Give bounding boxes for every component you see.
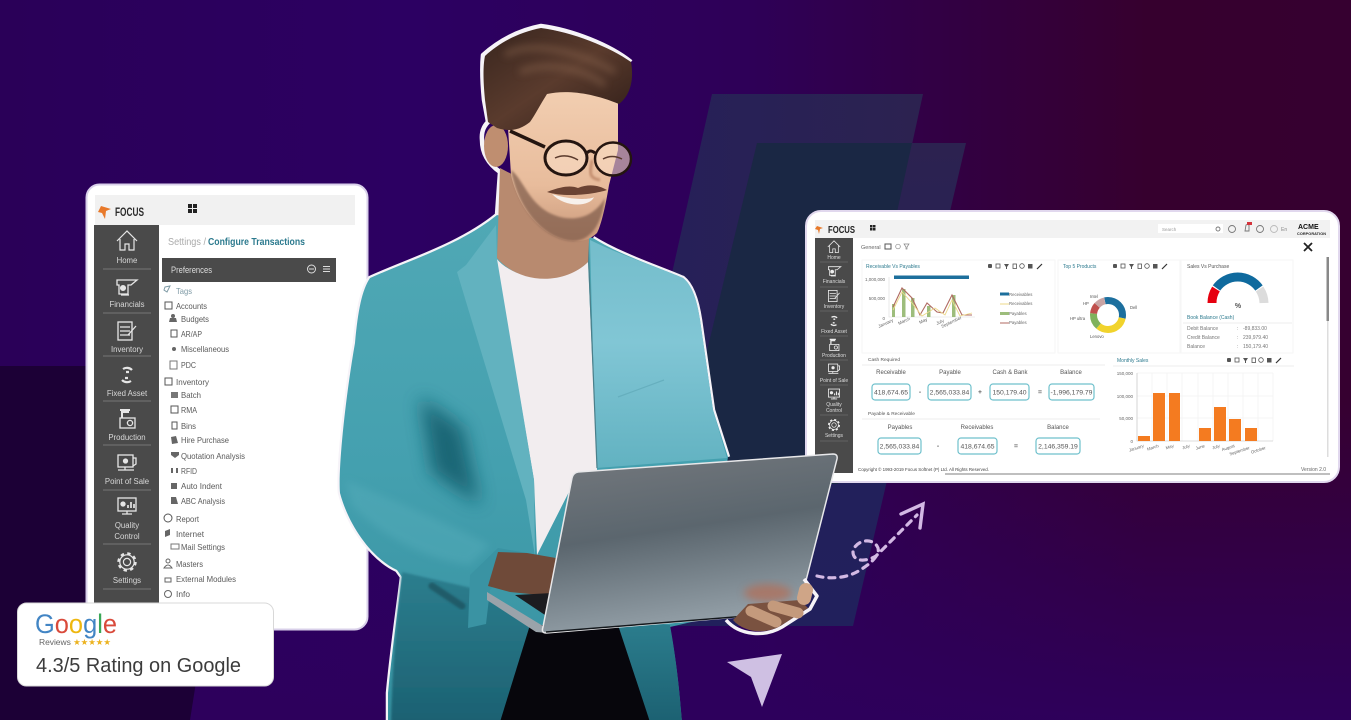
navigation sidebar: Control	[114, 532, 140, 541]
block: payable and receivable: Payable & Receivable	[868, 411, 915, 417]
dashboard sidebar: Point of Sale	[820, 378, 848, 384]
preferences menu tree: Miscellaneous	[181, 344, 229, 354]
block: cash required: Receivable	[876, 370, 907, 376]
chart: receivable vs payables: July	[935, 318, 945, 326]
preferences menu tree: Masters	[176, 559, 203, 569]
chart: top 5 products donut: Top 5 Products	[1063, 264, 1097, 270]
chart: receivable vs payables: 500,000	[869, 296, 885, 301]
dashboard sidebar: Production	[822, 353, 846, 359]
chart: monthly sales: 100,000	[1117, 394, 1133, 399]
nose shadow	[590, 160, 600, 180]
left lapel	[457, 225, 535, 556]
cursor arrow	[727, 654, 782, 707]
dashboard sidebar: Home	[827, 255, 841, 261]
chart: receivable vs payables: Receivables	[1009, 292, 1032, 297]
chart: receivable vs payables: May	[918, 316, 929, 325]
hair highlights	[505, 48, 615, 85]
torso shadow	[420, 397, 480, 505]
jacket base	[340, 215, 728, 720]
dashboard sidebar: Inventory	[824, 304, 845, 310]
dashboard top bar: Search	[1162, 227, 1177, 232]
chart: top 5 products donut: Intel	[1090, 294, 1098, 299]
preferences menu tree: Inventory	[176, 377, 210, 387]
dark background block, lower left	[0, 366, 246, 720]
preferences menu tree: Accounts	[176, 301, 207, 311]
navigation sidebar: Financials	[109, 300, 145, 309]
chart: top 5 products donut: Dell	[1130, 305, 1137, 310]
block: cash required: Payable	[939, 370, 962, 376]
parallelogram overlap	[675, 143, 912, 484]
settings header bar	[95, 195, 355, 225]
chart: receivable vs payables: March	[897, 316, 911, 326]
chart: monthly sales: 50,000	[1119, 416, 1133, 421]
background parallelogram, rear	[625, 94, 923, 484]
block: cash required: Cash & Bank	[992, 370, 1029, 376]
dashboard top bar: ACME	[1298, 224, 1319, 231]
preferences menu tree: AR/AP	[181, 329, 202, 339]
right hand shadow	[733, 600, 808, 631]
dashed arrow	[817, 504, 923, 578]
block: payable and receivable: 2,565,033.84	[880, 444, 920, 450]
block: payable and receivable: 418,674.65	[960, 444, 995, 450]
smile	[552, 194, 594, 205]
t-shirt	[496, 258, 597, 555]
dashboard sidebar: Financials	[823, 279, 846, 285]
navigation sidebar: Inventory	[111, 345, 143, 354]
dashboard footer	[858, 466, 1330, 474]
navigation sidebar: Production	[108, 433, 146, 442]
block: payable and receivable: Receivables	[961, 425, 993, 431]
dashboard sidebar: Fixed Asset	[821, 329, 848, 335]
chart: receivable vs payables: Receivables	[1009, 301, 1032, 306]
preferences menu tree: Tags	[176, 286, 192, 296]
preferences menu tree: Hire Purchase	[181, 435, 229, 445]
block: cash required: 418,674.65	[874, 390, 908, 396]
right thumb	[804, 590, 806, 598]
preferences menu tree: PDC	[181, 360, 196, 370]
sleeve fold highlight	[345, 480, 490, 565]
navigation sidebar: Fixed Asset	[107, 389, 148, 398]
preferences menu tree: External Modules	[176, 574, 236, 584]
jacket lower body	[391, 572, 535, 720]
breadcrumb heading	[168, 236, 305, 248]
laptop base	[487, 592, 547, 633]
chart: sales vs purchase gauge: Debit Balance	[1187, 326, 1218, 332]
right fingers	[751, 606, 798, 622]
dashboard sidebar: Quality	[826, 402, 842, 408]
block: payable and receivable: 2,146,359.19	[1038, 444, 1078, 450]
preferences menu tree: Info	[176, 589, 190, 599]
chart: top 5 products donut: Lenovo	[1090, 334, 1104, 339]
preferences bar	[162, 258, 336, 282]
chart: top 5 products donut	[1058, 260, 1180, 353]
navigation sidebar: Quality	[115, 521, 139, 530]
chart: receivable vs payables: Payables	[1009, 320, 1027, 325]
chart: sales vs purchase gauge: 150,179.40	[1243, 344, 1268, 350]
chart: monthly sales: May	[1165, 443, 1175, 450]
chart: monthly sales: January	[1128, 443, 1145, 453]
block: cash required: 2,565,033.84	[930, 390, 970, 396]
chart: receivable vs payables: January	[877, 317, 895, 329]
chart: receivable vs payables: Receivable Vs Payables	[866, 264, 920, 270]
hair	[484, 28, 632, 130]
trousers	[500, 625, 650, 720]
dashboard sidebar	[815, 238, 853, 473]
chart: monthly sales: June	[1195, 443, 1206, 451]
chart: sales vs purchase gauge: :	[1237, 344, 1238, 350]
preferences menu tree: RFID	[181, 466, 197, 476]
google wordmark: Google	[35, 609, 117, 639]
preferences menu tree: Mail Settings	[181, 542, 225, 552]
jacket lower right	[612, 620, 682, 720]
white cut-out outline	[340, 26, 728, 720]
breadcrumb heading: Configure Transactions	[208, 236, 305, 248]
block: payable and receivable: =	[1014, 443, 1018, 450]
chart: top 5 products donut: HP	[1083, 301, 1089, 306]
general heading: General	[861, 245, 881, 251]
preferences menu tree: Batch	[181, 390, 201, 400]
block: cash required: Cash Required	[868, 357, 900, 363]
jacket pocket line	[618, 380, 664, 397]
dashboard top bar: FOCUS	[828, 225, 855, 236]
person	[340, 26, 837, 720]
block: cash required: +	[978, 389, 982, 396]
focus logo: FOCUS	[115, 207, 144, 219]
reviews stars: Reviews ★★★★★	[39, 637, 111, 647]
sleeve buttons	[432, 586, 462, 606]
chart: monthly sales: 0	[1130, 439, 1133, 444]
navigation sidebar: Point of Sale	[105, 477, 149, 486]
breadcrumb heading: Settings /	[168, 236, 206, 248]
navigation sidebar: Home	[117, 256, 137, 265]
stubble	[511, 170, 605, 241]
preferences menu tree: RMA	[181, 405, 197, 415]
block: payable and receivable: Balance	[1047, 425, 1070, 431]
block: payable and receivable: -	[937, 443, 939, 450]
chart: monthly sales: July	[1211, 443, 1221, 450]
panel: dashboard window	[806, 211, 1339, 482]
block: payable and receivable	[862, 411, 1100, 454]
block: cash required: Balance	[1060, 370, 1083, 376]
block: cash required: =	[1038, 389, 1042, 396]
glasses	[510, 131, 631, 176]
chart: sales vs purchase gauge: 239,979.40	[1243, 335, 1268, 341]
chart: monthly sales: 150,000	[1117, 371, 1133, 376]
block: cash required: -1,996,179.79	[1051, 390, 1093, 396]
neck	[497, 168, 590, 279]
chart: monthly sales	[1113, 358, 1294, 456]
right palm glow	[744, 584, 792, 602]
chart: sales vs purchase gauge: Balance	[1187, 344, 1205, 350]
dashboard sidebar: Control	[826, 408, 842, 414]
dashboard top bar	[815, 220, 1330, 238]
preferences menu tree: Internet	[176, 529, 205, 539]
chart: sales vs purchase gauge: Credit Balance	[1187, 335, 1220, 341]
panel: google rating card	[18, 603, 274, 686]
preferences menu tree: Budgets	[181, 314, 209, 324]
preferences menu tree: ABC Analysis	[181, 496, 225, 506]
grid icon	[188, 204, 197, 213]
preferences menu tree: Bins	[181, 421, 196, 431]
closed eyes	[555, 156, 622, 160]
chart: sales vs purchase gauge: :	[1237, 335, 1238, 341]
preferences bar: Preferences	[171, 265, 212, 275]
general heading	[861, 244, 909, 251]
jacket cuff	[468, 548, 527, 628]
chart: receivable vs payables: Payables	[1009, 311, 1027, 316]
left hand	[488, 552, 556, 596]
right hand outline	[726, 579, 817, 633]
chart: sales vs purchase gauge: Book Balance (Cash)	[1187, 315, 1235, 321]
chart: top 5 products donut: HP ultra	[1070, 316, 1086, 321]
scrollbar	[1326, 257, 1329, 457]
chart: sales vs purchase gauge: -89,833.00	[1243, 326, 1267, 332]
dashboard top bar: En	[1281, 227, 1287, 233]
dashboard top bar: CORPORATION	[1297, 232, 1326, 236]
chart: sales vs purchase gauge	[1181, 260, 1293, 353]
dashboard footer: Copyright © 1993-2019 Focus Softnet (P) Ltd. All Rights Reserved.	[858, 466, 989, 473]
chart: monthly sales: September	[1229, 445, 1251, 456]
chart: monthly sales: October	[1250, 445, 1267, 455]
chart: monthly sales: Monthly Sales	[1117, 358, 1149, 364]
preferences menu tree: Quotation Analysis	[181, 451, 245, 461]
chart: receivable vs payables: September	[940, 315, 963, 329]
face	[505, 80, 618, 241]
chart: sales vs purchase gauge: %	[1235, 303, 1242, 310]
preferences menu tree: Report	[176, 514, 200, 524]
jacket right chest	[590, 240, 727, 468]
block: payable and receivable: Payables	[888, 425, 912, 431]
moustache	[547, 185, 607, 195]
chart: monthly sales: March	[1146, 443, 1160, 452]
rating text: 4.3/5 Rating on Google	[36, 655, 241, 677]
navigation sidebar	[94, 225, 159, 610]
chart: monthly sales: July	[1181, 443, 1191, 450]
preferences menu tree: Auto Indent	[181, 481, 223, 491]
panel: settings menu	[86, 184, 368, 630]
chart: receivable vs payables	[862, 260, 1055, 353]
laptop lid	[542, 454, 837, 633]
navigation sidebar: Settings	[113, 576, 141, 585]
chart: receivable vs payables: 0	[882, 316, 885, 321]
preferences menu tree	[164, 286, 245, 599]
laptop lower edge	[546, 612, 797, 632]
dashboard footer: Version 2.0	[1301, 467, 1326, 473]
right lapel edge	[588, 243, 597, 468]
chart: sales vs purchase gauge: Sales Vs Purchase	[1187, 264, 1229, 270]
background parallelogram, front	[640, 143, 966, 626]
fingers on keyboard	[515, 593, 552, 617]
block: cash required	[862, 357, 1105, 400]
chart: receivable vs payables: 1,000,000	[865, 277, 885, 282]
ear	[484, 125, 508, 167]
chart: sales vs purchase gauge: :	[1237, 326, 1238, 332]
focus logo	[98, 206, 144, 219]
block: cash required: -	[919, 389, 921, 396]
chart: monthly sales: August	[1221, 443, 1236, 452]
tools icon	[1304, 243, 1312, 251]
dashboard sidebar: Settings	[825, 433, 844, 439]
block: cash required: 150,179.40	[992, 390, 1027, 396]
